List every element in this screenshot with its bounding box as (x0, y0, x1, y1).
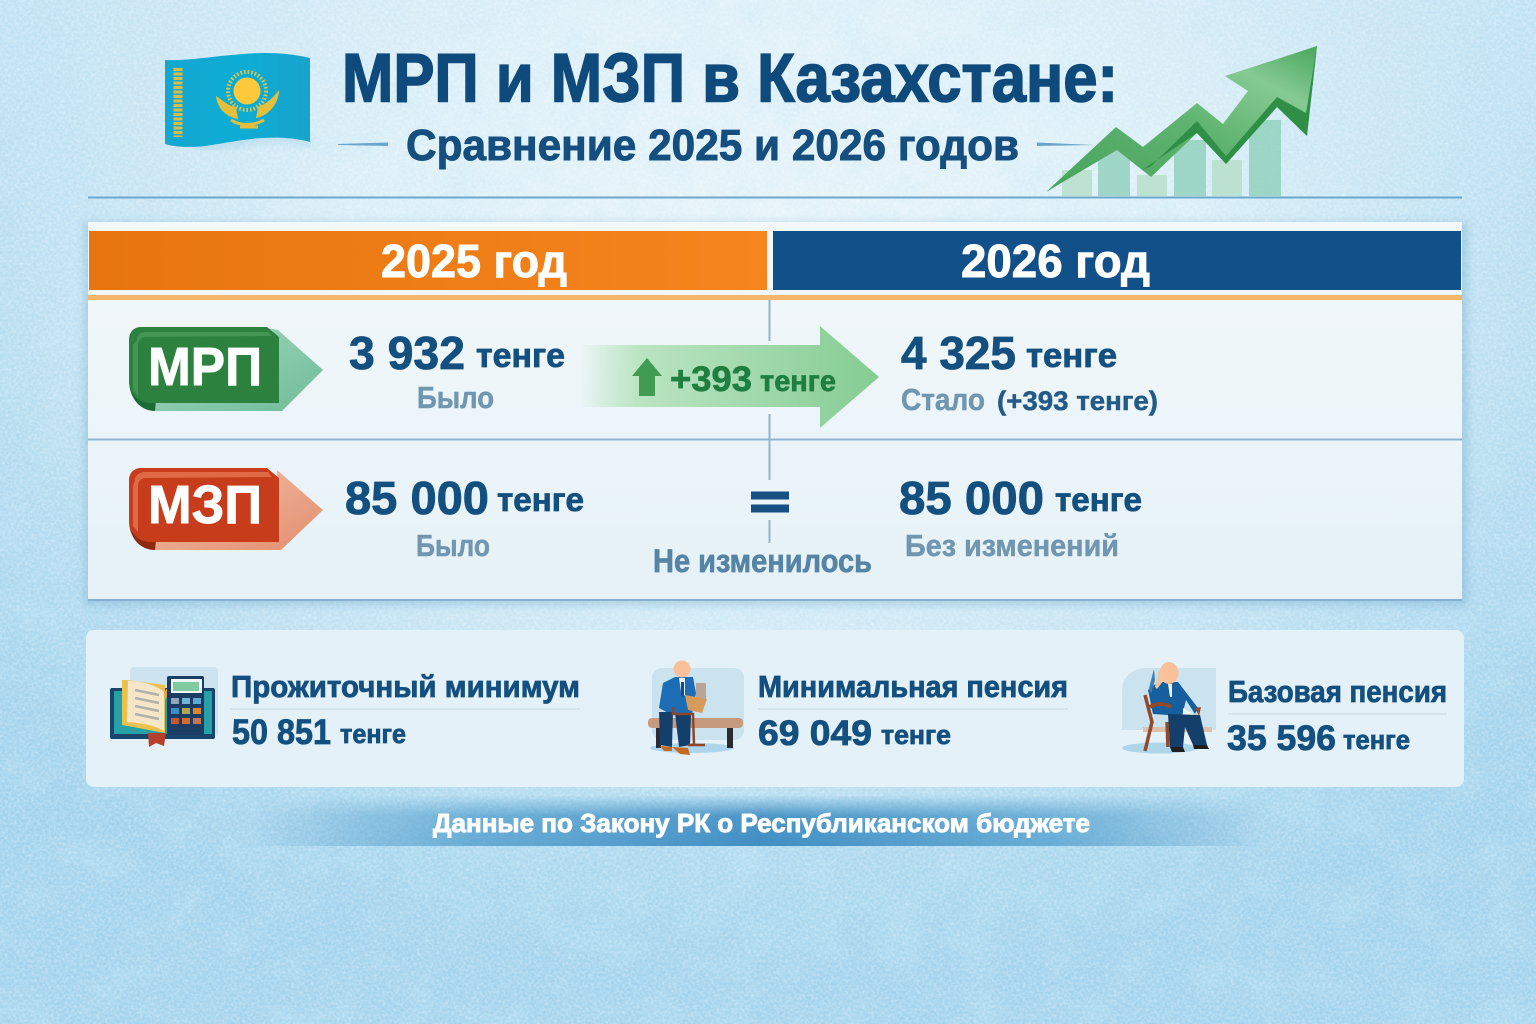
panel: comparison table (84, 222, 1468, 606)
icon: Kazakhstan flag (165, 53, 310, 147)
arrow: +393 тенге: +393 (670, 360, 752, 399)
footer banner: Данные по Закону РК о Республиканском бюджете (433, 808, 1090, 838)
row МЗП: value 2025: 85 000 (345, 472, 489, 524)
text: базовая пенсия: Базовая пенсия (1228, 674, 1447, 709)
text: прожиточный минимум: Прожиточный минимум (231, 669, 580, 704)
divider rule (88, 196, 1462, 198)
icon: pensioner on bench (648, 660, 744, 755)
badge: МЗП (129, 468, 323, 550)
text: минимальная пенсия: тенге (881, 720, 951, 750)
text: прожиточный минимум: тенге (340, 719, 406, 749)
subtitle: Сравнение 2025 и 2026 годов (406, 121, 1019, 170)
row МЗП: value 2026: тенге (1055, 481, 1142, 518)
header: 2026: 2026 год (961, 235, 1150, 287)
icon: book and calculator (110, 667, 218, 747)
row МЗП: value 2025: Было (416, 528, 490, 563)
text: базовая пенсия: тенге (1343, 725, 1410, 755)
icon: up arrow (632, 358, 662, 396)
text: базовая пенсия: 35 596 (1227, 719, 1336, 758)
row МРП: value 2026: Стало (901, 382, 985, 417)
row МЗП: value 2026: Без изменений (905, 528, 1119, 563)
row МРП: value 2026: тенге (1026, 337, 1117, 375)
row МЗП: value 2025: тенге (497, 481, 584, 518)
row МРП: value 2025 (349, 327, 565, 415)
row МРП: value 2025: тенге (476, 337, 565, 375)
icon: equals sign (751, 492, 789, 512)
header: 2026 (773, 231, 1461, 290)
title: МРП и МЗП в Казахстане: (342, 40, 1118, 116)
text: прожиточный минимум (230, 669, 580, 752)
text: минимальная пенсия: Минимальная пенсия (758, 669, 1068, 704)
chart: growth arrow with bars (1046, 46, 1317, 196)
badge: МЗП: МЗП (148, 475, 262, 535)
badge: МРП: МРП (148, 337, 262, 397)
text: базовая пенсия (1227, 674, 1447, 758)
text: минимальная пенсия (758, 669, 1068, 753)
label: no change: Не изменилось (653, 543, 872, 579)
row МЗП: value 2025 (345, 472, 584, 563)
footer banner (250, 796, 1270, 846)
row МРП: value 2026 (901, 327, 1158, 417)
row МРП: value 2026: 4 325 (901, 327, 1016, 379)
badge: МРП (129, 327, 323, 411)
row МЗП: value 2026 (899, 472, 1142, 563)
row МРП: value 2026: (+393 тенге) (997, 386, 1158, 416)
header: 2025: 2025 год (381, 235, 567, 287)
arrow: +393 тенге: тенге (760, 365, 836, 398)
text: минимальная пенсия: 69 049 (758, 714, 872, 753)
header: 2025 (89, 231, 767, 290)
icon: pensioner on chair (1122, 662, 1216, 754)
panel: other indicators (86, 630, 1464, 787)
row МЗП: value 2026: 85 000 (899, 472, 1044, 524)
arrow: +393 тенге (580, 326, 879, 428)
row МРП: value 2025: 3 932 (349, 327, 465, 379)
row МРП: value 2025: Было (417, 380, 494, 415)
text: прожиточный минимум: 50 851 (232, 713, 331, 752)
